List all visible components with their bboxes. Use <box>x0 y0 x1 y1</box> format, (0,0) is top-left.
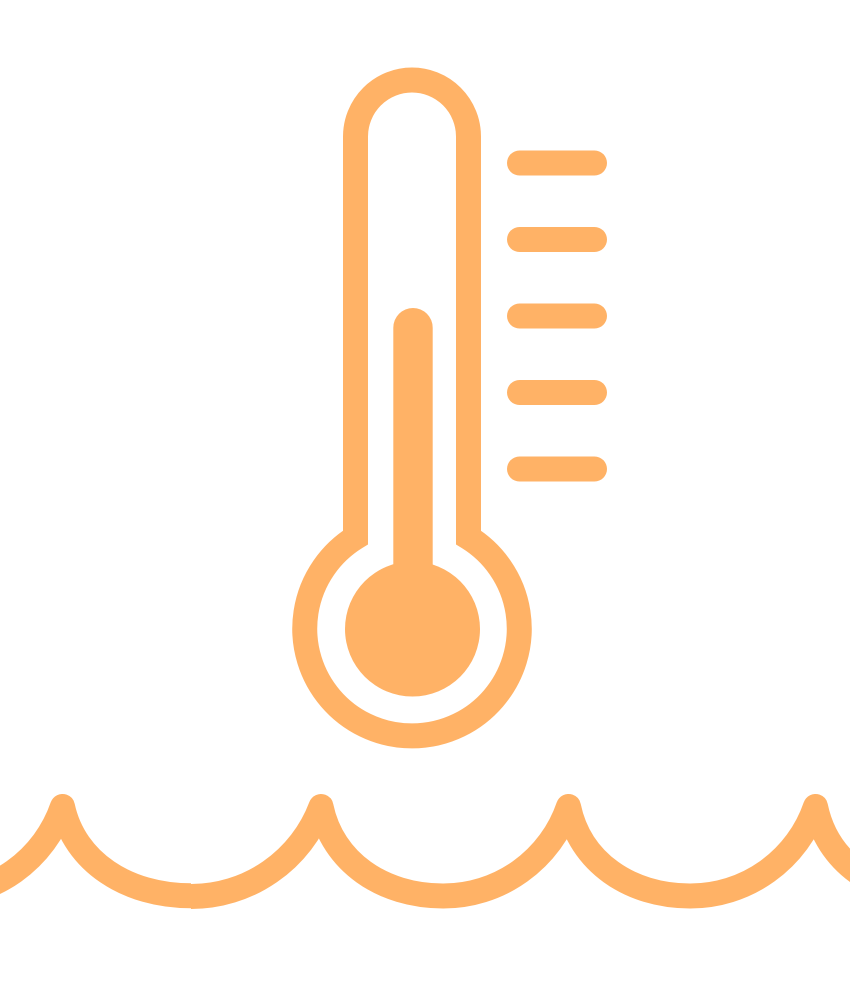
temperature scale marks <box>507 150 607 482</box>
icon: water waves <box>0 806 850 896</box>
icon: thermometer <box>305 80 519 736</box>
thermometer mercury <box>345 308 480 696</box>
thermometer outline <box>305 80 519 736</box>
